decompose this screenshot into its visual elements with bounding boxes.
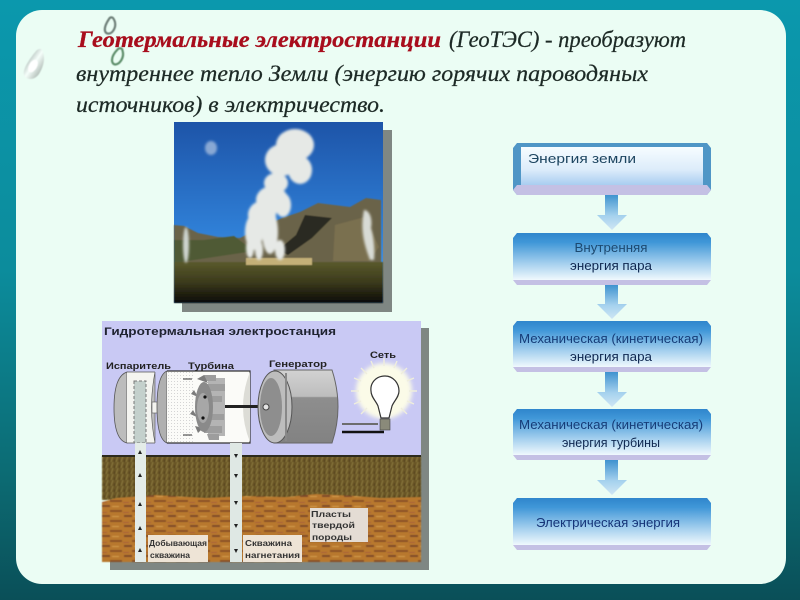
label box: injection well: Скважина (245, 538, 292, 548)
photo: geothermal plant with steam (174, 122, 392, 312)
label: turbine: Турбина (188, 361, 235, 372)
heading text (76, 27, 686, 117)
heading: red title: Геотермальные электростанции (77, 27, 441, 52)
arrow 4 (597, 460, 627, 495)
arrow 1 (597, 195, 627, 230)
heading: third line: источников) в электричество. (76, 92, 385, 117)
well flow arrows (138, 450, 238, 553)
label box: production well (148, 535, 208, 562)
flow box: internal steam energy (513, 233, 711, 285)
flow box: mechanical steam energy: энергия пара (570, 350, 652, 364)
heading: second line: внутреннее тепло Земли (энергию горячих пароводяных (76, 61, 649, 86)
label box: rock strata (310, 508, 368, 542)
production well (135, 443, 146, 562)
injection well (230, 443, 242, 562)
diagram sky (102, 321, 421, 457)
diagram title: Гидротермальная электростанция (104, 326, 336, 338)
evaporator (114, 372, 164, 443)
label box: rock strata: Пласты (311, 509, 351, 519)
shaft (225, 405, 267, 408)
flow box: internal steam energy: энергия пара (570, 259, 652, 273)
label box: rock strata: твердой (312, 520, 355, 530)
label: generator: Генератор (269, 359, 327, 370)
label: grid: Сеть (370, 350, 396, 361)
diagram: hydrothermal power station (102, 321, 429, 570)
icon: water droplets (24, 17, 123, 79)
label box: production well: Добывающая (149, 538, 207, 548)
heading: abbreviation line: (ГеоТЭС) - преобразуют (449, 27, 686, 52)
flow box: mechanical turbine energy: энергия турбины (562, 436, 660, 450)
label box: injection well: нагнетания (245, 550, 300, 560)
generator (258, 370, 338, 443)
turbine wheel (190, 375, 225, 440)
flow box: electrical energy: Электрическая энергия (536, 516, 680, 530)
diagram ground: upper layer (102, 456, 421, 500)
flow box: earth energy (513, 143, 711, 195)
flow box: mechanical turbine energy (513, 409, 711, 460)
wires (342, 424, 384, 432)
arrow 3 (597, 372, 627, 407)
label: evaporator: Испаритель (106, 361, 171, 372)
flow box: mechanical turbine energy: Механическая (кинетическая) (519, 418, 703, 432)
label box: rock strata: породы (312, 532, 352, 542)
turbine casing (157, 371, 267, 443)
diagram shadow (110, 328, 429, 570)
icon: light bulb (351, 358, 417, 430)
flow box: mechanical steam energy: Механическая (кинетическая) (519, 332, 703, 346)
flowchart: energy conversion (513, 143, 711, 550)
arrow 2 (597, 285, 627, 319)
flow box: internal steam energy: Внутренняя (574, 241, 648, 255)
ground surface line (102, 455, 421, 457)
label box: injection well (243, 535, 302, 562)
flow box: electrical energy (513, 498, 711, 550)
label box: production well: скважина (150, 550, 190, 560)
diagram ground: rock layer (102, 494, 421, 562)
flow box: mechanical steam energy (513, 321, 711, 372)
flow box: earth energy: Энергия земли (528, 151, 636, 166)
